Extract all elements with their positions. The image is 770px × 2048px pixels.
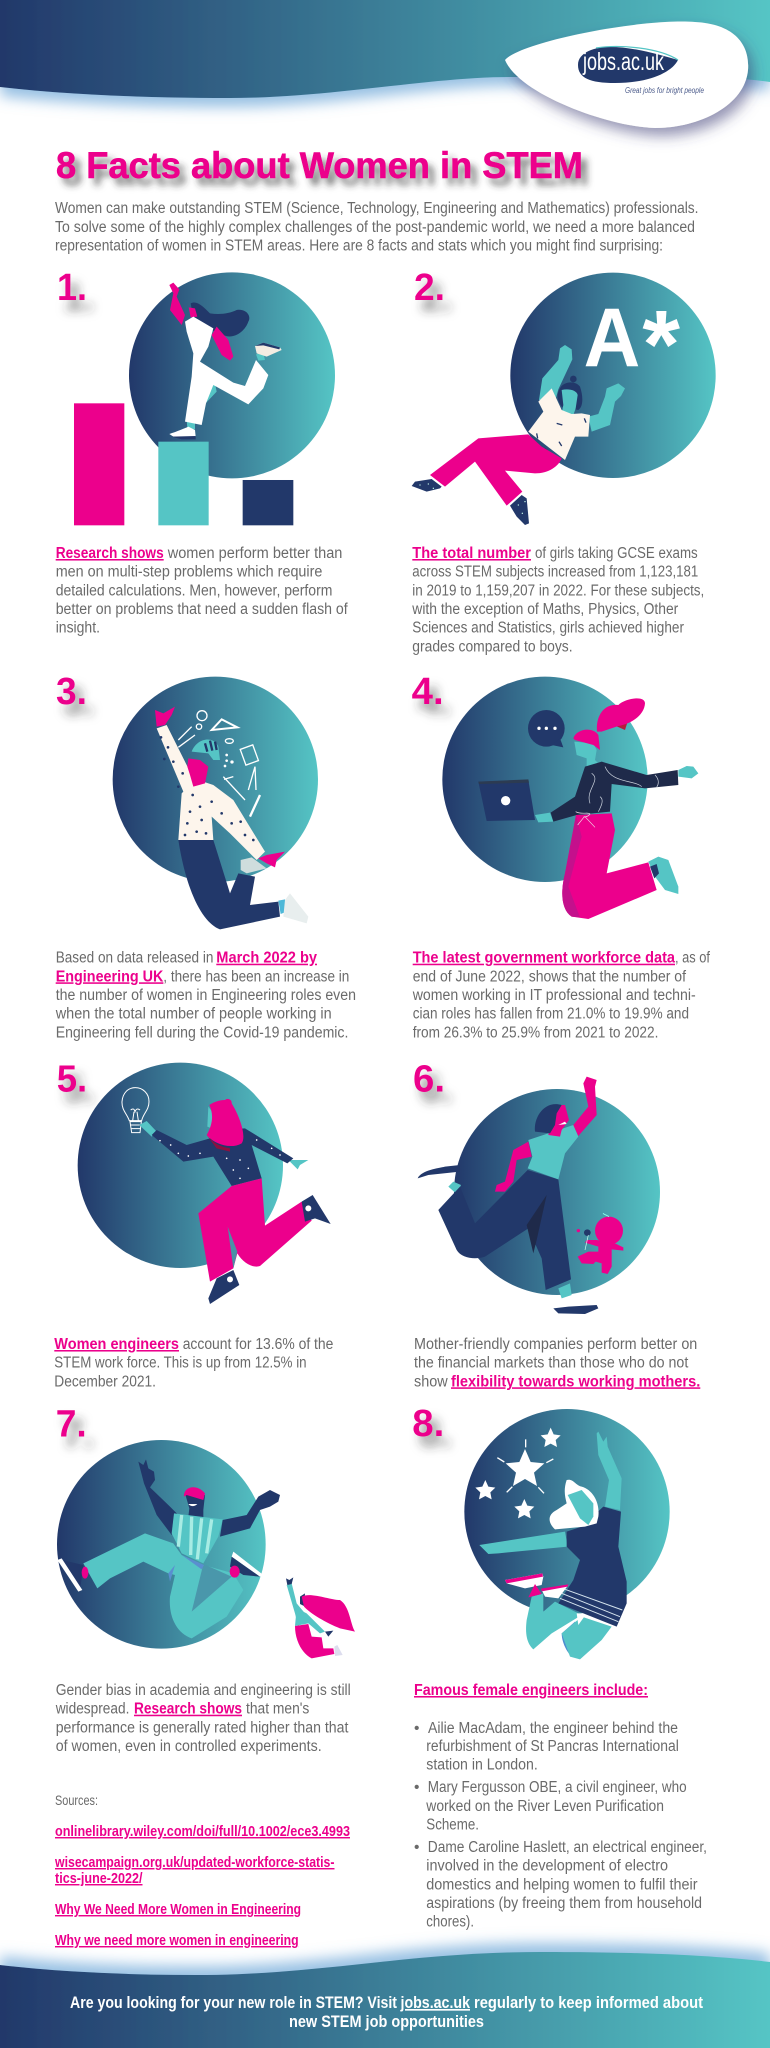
fact 5 text: STEM work force. This is up from 12.5% in	[54, 1355, 307, 1372]
fact 8 bulleted list: •	[414, 1779, 419, 1796]
fact 4 text: The latest government workforce data	[413, 950, 675, 967]
intro paragraph: To solve some of the highly complex challenges of the post-pandemic world, we need a more balanced	[55, 219, 695, 236]
panel: fact 2	[411, 267, 716, 655]
fact 8 bulleted list	[414, 1720, 707, 1931]
fact 5 text	[54, 1336, 333, 1390]
intro paragraph: Women can make outstanding STEM (Science, Technology, Engineering and Mathematics) professionals.	[55, 200, 698, 217]
fact 1 text: men on multi-step problems which require	[56, 564, 322, 581]
fact 8 bulleted list: •	[414, 1839, 419, 1856]
intro paragraph: representation of women in STEM areas. Here are 8 facts and stats which you might find surprising:	[55, 238, 663, 254]
number 2: 2.	[414, 267, 445, 309]
illustration: woman with A star: A	[584, 291, 640, 384]
jobs.ac.uk logo: Great jobs for bright people	[625, 86, 704, 95]
title: 8 Facts about Women in STEM	[56, 145, 583, 186]
illustration: jumping man and small woman	[57, 1440, 355, 1658]
illustration: woman with A star: *	[642, 290, 680, 398]
number 7: 7.	[56, 1404, 87, 1446]
footer call to action: jobs.ac.uk	[400, 1994, 471, 2012]
fact 7 text	[55, 1682, 351, 1755]
fact 8 bulleted list: Scheme.	[426, 1816, 479, 1834]
fact 2 text: grades compared to boys.	[412, 638, 573, 655]
illustration: mother and baby	[418, 1077, 660, 1314]
fact 2 text: in 2019 to 1,159,207 in 2022. For these subjects,	[412, 582, 704, 599]
fact 2 text: Sciences and Statistics, girls achieved higher	[412, 620, 684, 637]
fact 4 text: from 26.3% to 25.9% from 2021 to 2022.	[413, 1024, 658, 1041]
fact 6 text: show	[414, 1373, 448, 1390]
fact 8 bulleted list: refurbishment of St Pancras International	[426, 1738, 679, 1755]
fact 6 text: the financial markets than those who do not	[414, 1355, 689, 1372]
fact 3 text: Based on data released in	[56, 950, 213, 967]
panel: fact 5	[54, 1059, 333, 1390]
footer call to action: regularly to keep informed about	[474, 1994, 703, 2012]
fact 4 text: cian roles has fallen from 21.0% to 19.9% and	[413, 1006, 689, 1023]
sources list: wisecampaign.org.uk/updated-workforce-statis-	[54, 1855, 335, 1871]
number 4: 4.	[412, 671, 444, 713]
fact 2 text	[411, 545, 704, 655]
footer call to action	[70, 1994, 703, 2031]
jobs.ac.uk logo	[505, 22, 748, 128]
panel: fact 4	[412, 671, 711, 1041]
fact 8 bulleted list: Dame Caroline Haslett, an electrical engineer,	[428, 1839, 707, 1856]
panel: fact 3	[55, 671, 356, 1041]
fact 8 bulleted list: Ailie MacAdam, the engineer behind the	[428, 1720, 678, 1737]
fact 7 text: of women, even in controlled experiments.	[56, 1738, 322, 1755]
fact 6 text: flexibility towards working mothers.	[451, 1373, 700, 1390]
fact 1 text: Research shows	[56, 545, 164, 562]
fact 5 text: account for 13.6% of the	[183, 1336, 333, 1353]
fact 8 bulleted list: station in London.	[426, 1756, 538, 1774]
footer call to action: Are you looking for your new role in STEM? Visit	[70, 1994, 397, 2012]
fact 7 text: widespread.	[55, 1701, 129, 1718]
fact 4 text: , as of	[675, 950, 711, 967]
number 6: 6.	[413, 1059, 445, 1101]
fact 4 text	[412, 950, 711, 1041]
fact 3 text: when the total number of people working in	[55, 1006, 332, 1023]
fact 8 bulleted list: chores).	[426, 1914, 474, 1931]
fact 2 text: across STEM subjects increased from 1,123,181	[412, 564, 698, 581]
fact 2 text: The total number	[412, 545, 531, 562]
jobs.ac.uk logo: jobs.ac.uk	[582, 48, 664, 76]
fact 8 bulleted list: Mary Fergusson OBE, a civil engineer, who	[428, 1779, 687, 1796]
panel: fact 6	[413, 1059, 700, 1390]
fact 6 text: Mother-friendly companies perform better on	[414, 1336, 697, 1353]
fact 1 text	[56, 545, 348, 637]
fact 1 text: insight.	[56, 620, 100, 637]
fact 3 text: the number of women in Engineering roles even	[56, 987, 356, 1004]
number 5: 5.	[57, 1059, 87, 1101]
fact 8 bulleted list: involved in the development of electro	[426, 1858, 668, 1875]
number 1: 1.	[57, 267, 87, 309]
fact 4 text: women working in IT professional and techni-	[412, 987, 696, 1004]
illustration: woman reaching for stars	[464, 1409, 670, 1659]
fact 3 text: Engineering fell during the Covid-19 pandemic.	[56, 1024, 348, 1041]
illustration: woman with engineering tools	[113, 677, 318, 929]
illustration: woman with A star	[412, 273, 716, 525]
number 3: 3.	[56, 671, 87, 713]
fact 8 bulleted list: domestics and helping women to fulfil their	[426, 1876, 698, 1893]
fact 1 text: women perform better than	[167, 545, 342, 562]
fact 1 text: detailed calculations. Men, however, perform	[56, 582, 332, 599]
fact 3 text: Engineering UK	[56, 968, 164, 985]
illustration: woman with laptop	[442, 677, 698, 919]
fact 7 text: Gender bias in academia and engineering is still	[56, 1682, 351, 1699]
sources list: Sources:	[55, 1792, 98, 1808]
sources list	[54, 1792, 350, 1949]
fact 5 text: December 2021.	[54, 1373, 156, 1390]
fact 4 text: end of June 2022, shows that the number of	[413, 968, 687, 985]
fact 2 text: of girls taking GCSE exams	[535, 545, 698, 562]
fact 8 heading: Famous female engineers include:	[414, 1682, 648, 1699]
fact 8 bulleted list: •	[414, 1720, 419, 1737]
sources list: onlinelibrary.wiley.com/doi/full/10.1002/ece3.4993	[55, 1824, 350, 1840]
panel: fact 1	[56, 267, 348, 637]
fact 3 text: March 2022 by	[216, 950, 317, 967]
sources list: Why We Need More Women in Engineering	[55, 1902, 301, 1918]
sources list: tics-june-2022/	[55, 1871, 142, 1887]
illustration: woman with light bulb	[78, 1063, 331, 1304]
footer call to action: new STEM job opportunities	[289, 2013, 484, 2031]
fact 3 text	[55, 950, 356, 1041]
fact 7 text: performance is generally rated higher than that	[56, 1719, 349, 1736]
fact 6 text	[414, 1336, 700, 1390]
fact 7 text: that men's	[246, 1701, 310, 1718]
panel: fact 7	[55, 1404, 355, 1755]
fact 8 bulleted list: aspirations (by freeing them from household	[426, 1895, 702, 1912]
fact 3 text: , there has been an increase in	[163, 968, 349, 985]
sources list: Why we need more women in engineering	[55, 1933, 299, 1949]
fact 1 text: better on problems that need a sudden flash of	[56, 601, 348, 618]
fact 2 text: with the exception of Maths, Physics, Other	[411, 601, 678, 618]
illustration: woman on bar chart	[74, 272, 335, 525]
intro paragraph	[55, 200, 698, 254]
panel: fact 8	[412, 1403, 707, 1931]
fact 5 text: Women engineers	[54, 1336, 179, 1353]
header wave banner	[0, 0, 770, 98]
fact 8 bulleted list: worked on the River Leven Purification	[425, 1798, 664, 1815]
number 8: 8.	[412, 1403, 444, 1445]
fact 7 text: Research shows	[134, 1701, 242, 1718]
footer wave banner	[0, 1952, 770, 2048]
